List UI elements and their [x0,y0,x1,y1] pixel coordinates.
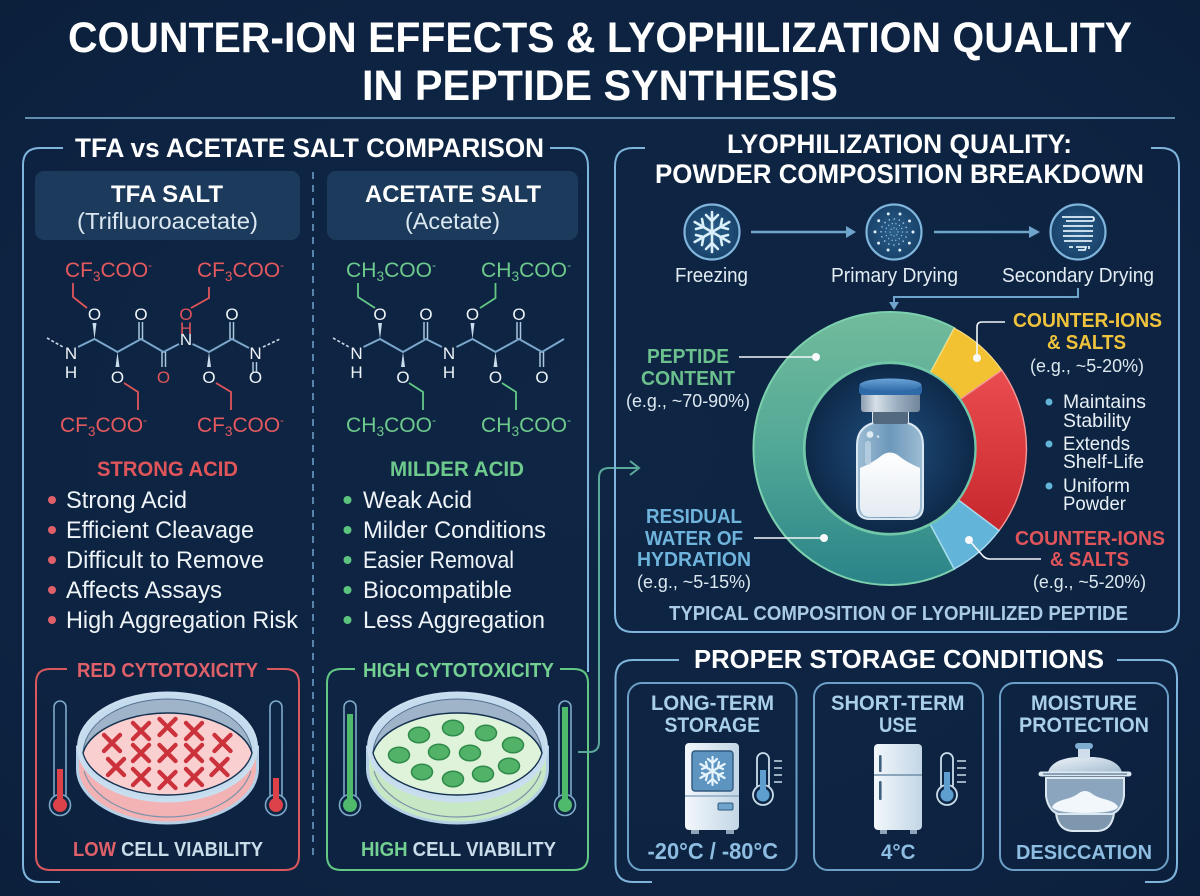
card: long-term storage [628,683,796,870]
chemical structure: acetate: CH [481,258,512,282]
icon: secondary drying [1050,204,1106,260]
icon: vial of powder [857,378,923,519]
donut chart: powder composition [753,312,1026,585]
chemical structure: TFA: 3 [88,423,96,439]
chemical structure: TFA: H [180,319,192,338]
chemical structure: TFA: 3 [225,268,233,284]
panel: TFA cytotoxicity [36,659,299,870]
arrow: freezing to primary [751,226,856,238]
chemical structure: TFA: COO [100,258,148,282]
heading: lyophilization [655,129,1144,189]
chemical structure: acetate: - [432,258,436,272]
chemical structure: acetate: 3 [511,423,519,439]
panel: TFA vs acetate comparison [23,133,588,882]
labels: process steps: Freezing [675,264,748,287]
icon: freezing [684,204,740,260]
arrow: secondary drying to composition [889,288,1078,310]
chemical structure: TFA: COO [95,413,143,437]
chemical structure: TFA: O [179,305,193,324]
chemical structure: TFA: N [65,344,77,363]
card: short-term use: SHORT-TERM [831,692,964,715]
icon: primary drying [866,204,922,260]
callout: red counter-ions: & SALTS [1050,549,1129,571]
list: TFA properties: Difficult to Remove [66,547,264,574]
chemical structure: TFA: O [225,305,239,324]
chemical structure: TFA: O [111,368,124,387]
card: long-term storage: -20°C / -80°C [648,838,778,864]
card: long-term storage: LONG-TERM [651,692,774,715]
chemical structure: TFA: N [249,344,262,363]
chemical structure: acetate: - [567,258,571,272]
title [68,14,1132,110]
icon: left thermometer [340,701,360,816]
chemical structure: acetate: H [350,363,363,382]
icon: thermometer [937,753,966,805]
chemical structure: acetate: COO [384,258,432,282]
icon: thermometer [753,753,782,805]
segment: peptide and water [753,312,954,585]
chemical structure: TFA: CF [60,413,89,437]
chemical structure: TFA: COO [232,258,280,282]
callout: red counter-ions: COUNTER-IONS [1015,528,1165,550]
title: COUNTER-ION EFFECTS & LYOPHILIZATION QUALITY [68,14,1132,62]
chemical structure: TFA: CF [65,258,94,282]
card: moisture protection: PROTECTION [1019,714,1149,737]
panel: lyophilization quality [615,129,1179,632]
TFA header: TFA SALT [111,181,223,208]
list: TFA properties: Affects Assays [66,577,222,604]
panel: TFA cytotoxicity: RED CYTOTOXICITY [77,659,258,682]
card: short-term use: 4°C [881,841,916,864]
arrow: primary to secondary [934,226,1040,238]
chemical structure: TFA: CF [197,258,226,282]
chemical structure: acetate: COO [519,413,567,437]
chemical structure: acetate: O [512,305,526,324]
chemical structure: acetate: CH [346,258,377,282]
callout: residual water: WATER OF [645,528,743,550]
chemical structure: acetate: CH [346,413,377,437]
chemical structure: TFA [47,258,284,439]
acetate header: (Acetate) [405,208,500,234]
icon: right thermometer [266,701,286,816]
heading: comparison: TFA vs ACETATE SALT COMPARISON [75,133,544,163]
list: powder benefits [1046,391,1146,515]
list: acetate properties [344,487,546,634]
label: milder acid: MILDER ACID [390,458,524,481]
card: short-term use [814,683,983,870]
chemical structure: TFA: - [280,258,284,272]
heading: storage: PROPER STORAGE CONDITIONS [694,644,1104,674]
callout: residual water: RESIDUAL [646,506,742,528]
chemical structure: acetate: O [396,368,410,387]
chemical structure: TFA: O [157,368,170,387]
icon: freezer [685,743,739,834]
callout: peptide content: CONTENT [641,368,735,390]
chemical structure: TFA: O [249,368,262,387]
chemical structure: acetate: O [535,368,549,387]
list: powder benefits: Powder [1063,493,1126,515]
card: short-term use: USE [879,714,917,737]
list: powder benefits: Maintains [1063,391,1146,413]
callout: yellow counter-ions [973,310,1162,376]
TFA header: (Trifluoroacetate) [77,208,258,234]
list: acetate properties: Weak Acid [363,487,472,514]
card: moisture protection [1000,683,1168,870]
list: acetate properties: Milder Conditions [363,517,546,544]
chemical structure: TFA: O [134,305,148,324]
title: IN PEPTIDE SYNTHESIS [362,62,838,110]
list: powder benefits: Extends [1063,433,1130,455]
callout: red counter-ions: (e.g., ~5-20%) [1033,571,1146,592]
chemical structure: acetate: O [419,305,433,324]
chemical structure: TFA: - [143,413,147,427]
chemical structure: TFA: CF [197,413,226,437]
list: TFA properties: Strong Acid [66,487,187,514]
acetate header: ACETATE SALT [365,181,541,208]
icon: petri dish with dead cells [78,693,258,823]
label: strong acid: STRONG ACID [97,458,238,481]
panel: acetate cytotoxicity [327,659,588,870]
callout: peptide content: PEPTIDE [647,346,729,368]
segment: red counter-ions [959,370,1026,531]
list: powder benefits: Stability [1063,410,1131,432]
acetate header [327,171,578,240]
icon: petri dish with healthy cells [368,693,548,823]
heading: lyophilization: POWDER COMPOSITION BREAKDOWN [655,159,1144,189]
chemical structure: TFA: 3 [93,268,101,284]
icon: refrigerator [874,744,922,834]
card: moisture protection: DESICCATION [1016,841,1152,864]
chemical structure: TFA: O [88,305,101,324]
card: moisture protection: MOISTURE [1031,692,1137,715]
segment: blue water [930,500,999,569]
callout: peptide content [626,346,820,411]
list: TFA properties [48,487,299,634]
segment: yellow counter-ions [930,328,1002,399]
labels: process steps [675,264,1154,287]
caption: composition: TYPICAL COMPOSITION OF LYOPHILIZED PEPTIDE [669,603,1128,625]
list: TFA properties: High Aggregation Risk [66,607,299,634]
chemical structure: acetate: O [373,305,387,324]
labels: process steps: Secondary Drying [1002,264,1154,287]
chemical structure: acetate: 3 [376,423,384,439]
chemical structure: acetate: H [443,363,455,382]
list: acetate properties: Easier Removal [363,547,514,574]
callout: red counter-ions [965,528,1165,592]
label: high cell viability: HIGH CELL VIABILITY [361,838,556,861]
callout: residual water: (e.g., ~5-15%) [637,571,751,592]
list: acetate properties: Less Aggregation [363,607,545,634]
label: low cell viability: LOW CELL VIABILITY [73,838,263,861]
callout: yellow counter-ions: & SALTS [1047,332,1126,354]
icon: desiccator [1041,743,1129,831]
labels: process steps: Primary Drying [831,264,958,287]
chemical structure: acetate: COO [519,258,567,282]
chemical structure: TFA: N [180,330,192,349]
chemical structure: TFA: COO [232,413,280,437]
callout: residual water: HYDRATION [637,549,751,571]
list: TFA properties: Efficient Cleavage [66,517,254,544]
chemical structure: TFA: - [280,413,284,427]
chemical structure: TFA: 3 [225,423,233,439]
list: powder benefits: Uniform [1063,475,1130,497]
chemical structure: TFA: O [202,368,216,387]
chemical structure: TFA: - [148,258,152,272]
list: acetate properties: Biocompatible [363,577,512,604]
callout: yellow counter-ions: COUNTER-IONS [1013,310,1162,332]
chemical structure: acetate: 3 [376,268,384,284]
chemical structure: acetate: COO [384,413,432,437]
callout: peptide content: (e.g., ~70-90%) [626,390,750,411]
TFA header [35,171,300,240]
chemical structure: TFA: H [65,363,77,382]
chemical structure: acetate: CH [481,413,512,437]
panel: acetate cytotoxicity: HIGH CYTOTOXICITY [363,659,554,682]
chemical structure: acetate: N [443,344,455,363]
chemical structure: acetate: - [432,413,436,427]
callout: residual water [637,506,828,592]
heading: lyophilization: LYOPHILIZATION QUALITY: [727,129,1072,159]
chemical structure: acetate: 3 [511,268,519,284]
list: powder benefits: Shelf-Life [1063,451,1144,473]
arrow: comparison to lyophilization [578,461,639,752]
panel: proper storage conditions [616,644,1177,882]
callout: yellow counter-ions: (e.g., ~5-20%) [1030,355,1144,376]
chemical structure: acetate: N [350,344,363,363]
chemical structure: acetate: - [567,413,571,427]
chemical structure: acetate: O [466,305,479,324]
card: long-term storage: STORAGE [664,714,760,737]
chemical structure: acetate: O [489,368,502,387]
icon: left thermometer [50,701,70,816]
icon: right thermometer [554,701,576,816]
chemical structure: acetate [333,258,571,439]
